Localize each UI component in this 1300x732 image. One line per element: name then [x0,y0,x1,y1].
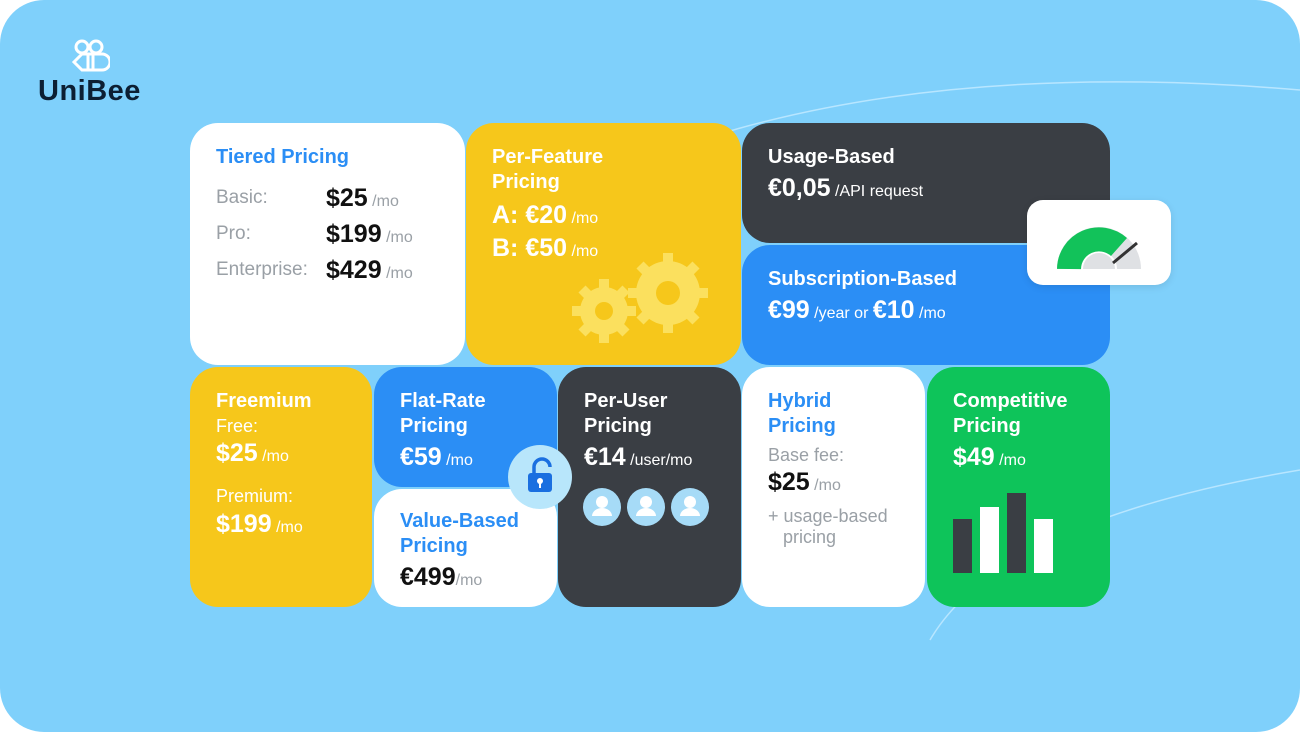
card: freemium: $199 /mo [216,510,303,538]
logo: UniBee [38,75,141,107]
card: subscription-based: €99 /year or €10 /mo [768,296,946,324]
card: freemium: Premium: [216,486,293,506]
card: tiered pricing: Enterprise: [216,259,308,280]
card: usage-based: Usage-Based [768,146,895,168]
card: tiered pricing: $429 /mo [326,256,413,284]
card: flat-rate: Pricing [400,415,468,437]
card: tiered pricing: $199 /mo [326,220,413,248]
card: competitive: Competitive [953,390,1067,412]
card: hybrid: $25 /mo [768,468,841,496]
card: tiered pricing: $25 /mo [326,184,399,212]
card: per-feature [466,123,741,365]
icon: users [583,488,709,526]
card: freemium: $25 /mo [216,439,289,467]
card: usage-based [742,123,1110,243]
icon: gauge [1027,200,1171,285]
card: competitive [927,367,1110,607]
card: tiered pricing: Basic: [216,187,268,208]
card: per-feature: B: €50 /mo [492,234,598,262]
card: freemium [190,367,372,607]
card: freemium: Free: [216,416,258,436]
card: value-based: €499/mo [400,563,482,591]
card: hybrid [742,367,925,607]
card: competitive: Pricing [953,415,1021,437]
card: flat-rate: €59 /mo [400,443,473,471]
card: flat-rate: Flat-Rate [400,390,486,412]
chart: bars [953,493,1053,573]
card: hybrid: pricing [783,527,836,547]
card: per-user: Pricing [584,415,652,437]
card: hybrid: Hybrid [768,390,831,412]
icon: gears [572,253,708,343]
card: per-user [558,367,741,607]
card: freemium: Freemium [216,390,312,412]
card: hybrid: Pricing [768,415,836,437]
card: value-based: Value-Based [400,510,519,532]
card: tiered pricing: Pro: [216,223,251,244]
card: usage-based: €0,05 /API request [768,174,923,202]
card: subscription-based [742,245,1110,365]
card: per-user: €14 /user/mo [584,443,692,471]
card: value-based: Pricing [400,535,468,557]
card: hybrid: + usage-based [768,506,888,526]
card: value-based [374,489,557,607]
card: hybrid: Base fee: [768,445,844,465]
icon: lock [508,445,572,509]
logo [38,40,141,107]
card: per-feature: Per-Feature [492,146,603,168]
card: per-feature: A: €20 /mo [492,201,598,229]
card: per-feature: Pricing [492,171,560,193]
card: subscription-based: Subscription-Based [768,268,957,290]
card: competitive: $49 /mo [953,443,1026,471]
card: tiered pricing: Tiered Pricing [216,146,349,168]
card: tiered pricing [190,123,465,365]
card: per-user: Per-User [584,390,667,412]
card: flat-rate [374,367,557,487]
